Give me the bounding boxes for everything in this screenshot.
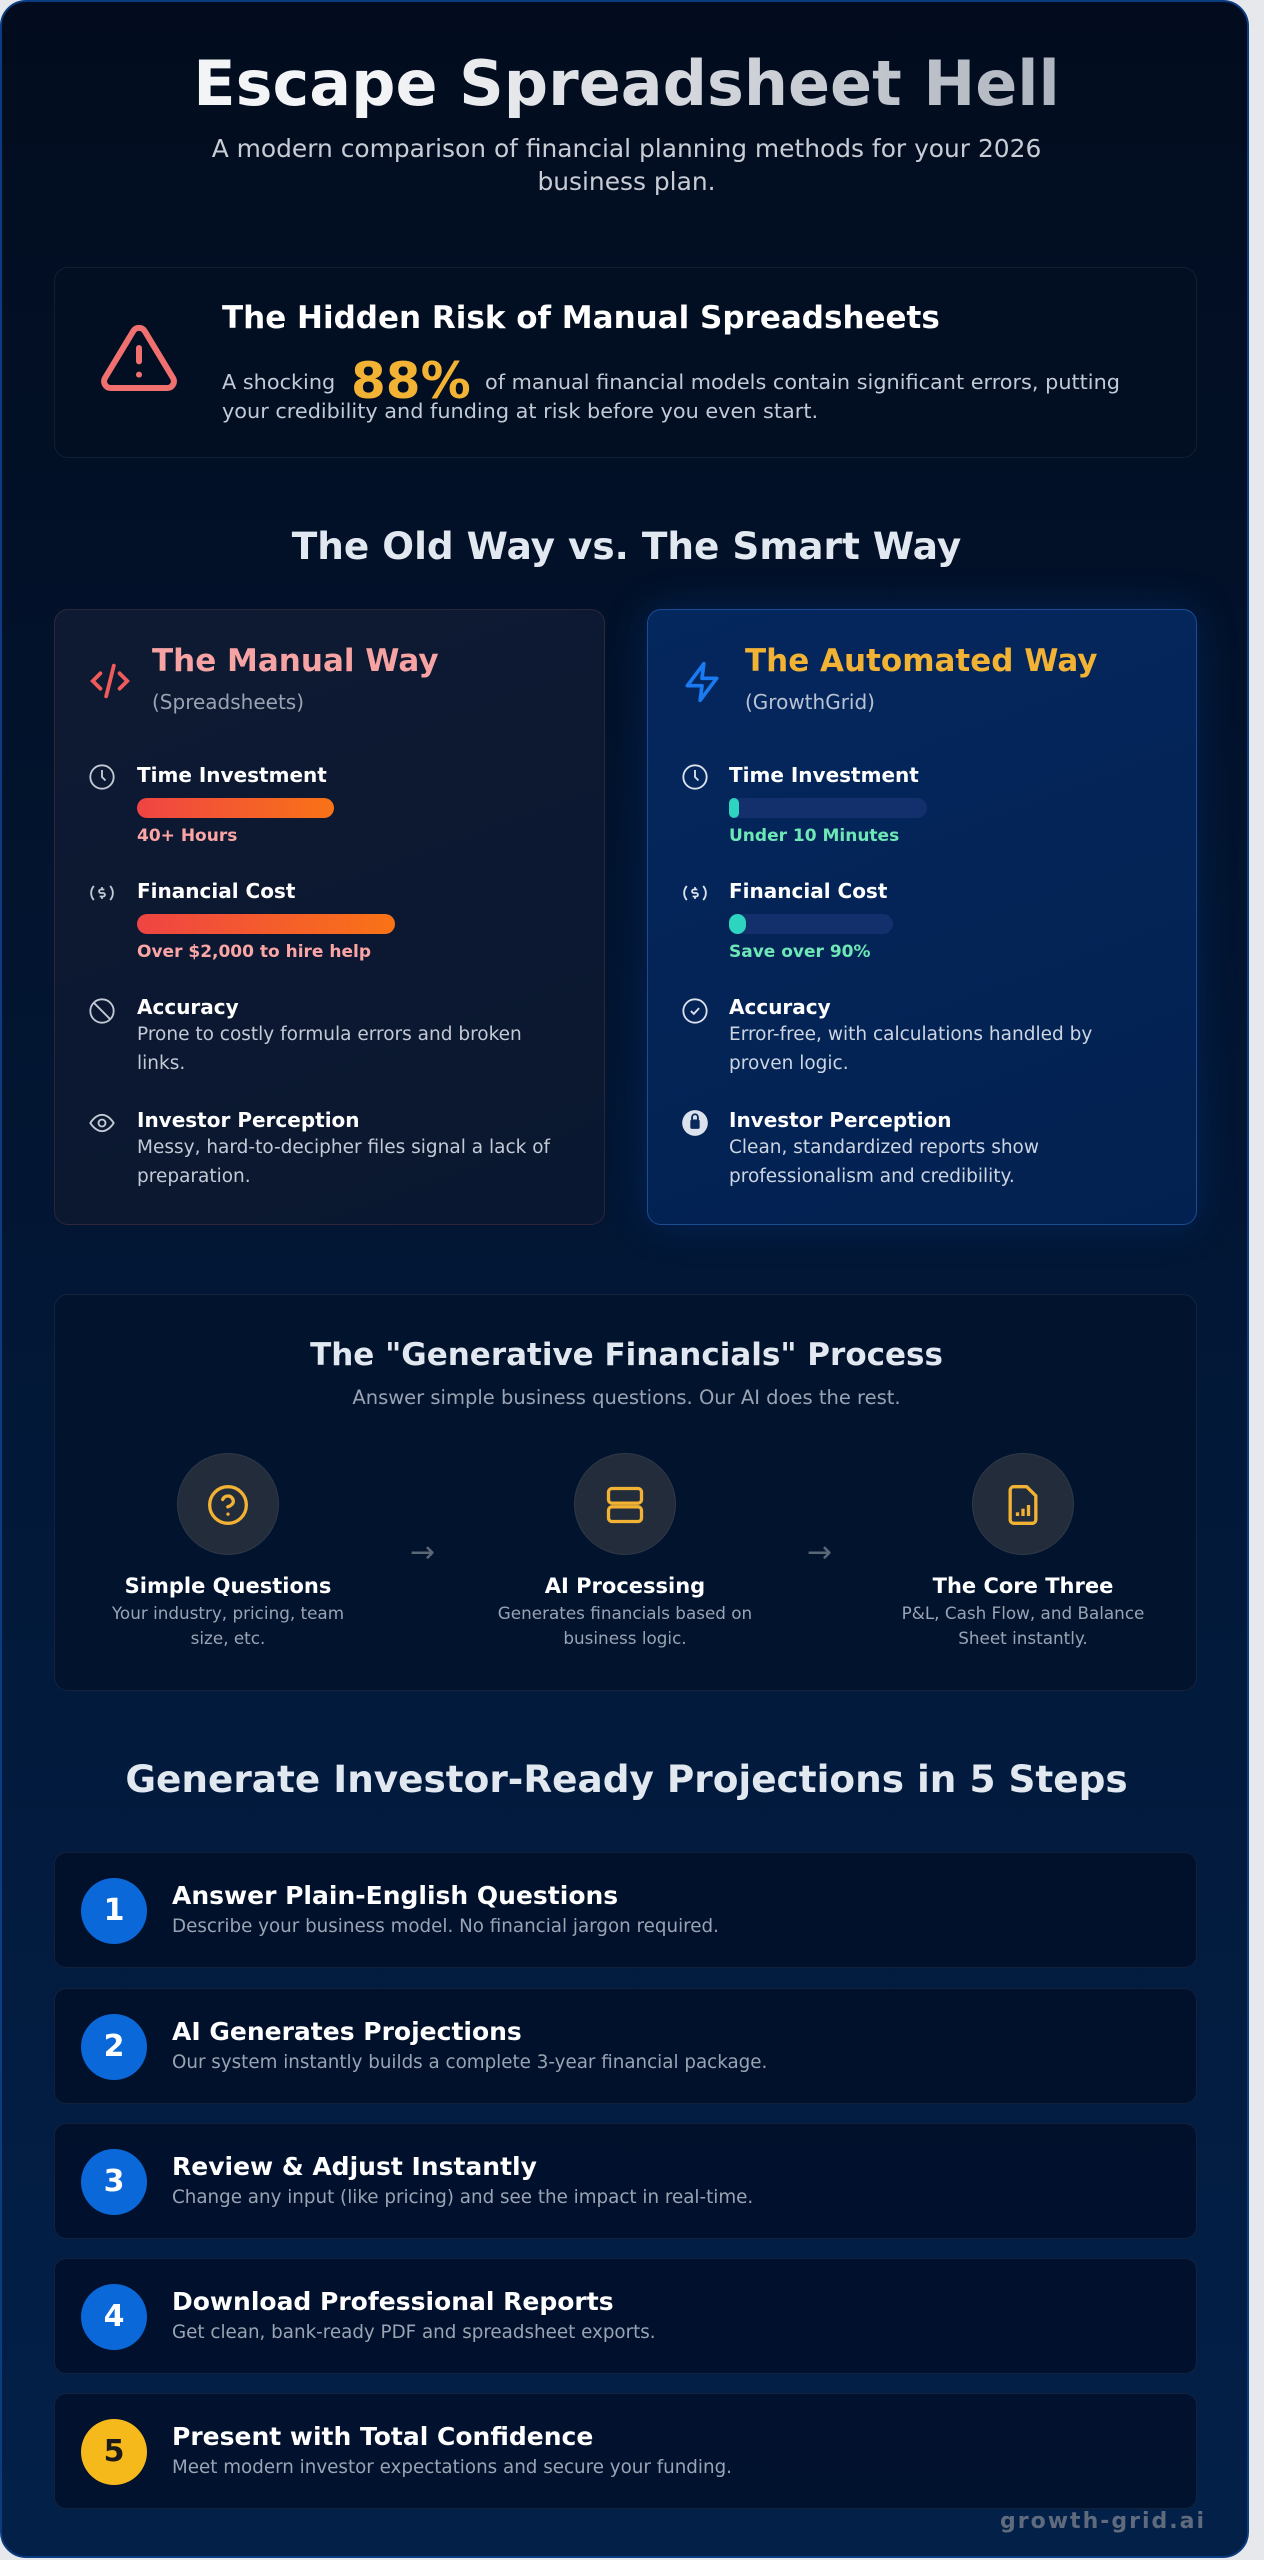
title: Escape Spreadsheet Hell: [193, 47, 1060, 120]
step 5: [54, 2393, 1197, 2509]
icon: file chart: [972, 1453, 1074, 1555]
stat text: your credibility and funding at risk before you even start.: [222, 399, 818, 423]
step 4: 4: [104, 2299, 124, 2334]
step: AI processing: Generates financials based on business logic.: [498, 1603, 752, 1648]
step: simple questions: Your industry, pricing, team size, etc.: [112, 1603, 344, 1648]
step 2: 2: [104, 2029, 124, 2064]
step 4: Download Professional Reports: [172, 2287, 614, 2316]
step 5: Present with Total Confidence: [172, 2422, 593, 2451]
stat: 88%: 88%: [351, 352, 471, 410]
icon: bolt: [685, 662, 719, 702]
step: simple questions: [112, 1453, 344, 1648]
footer brand: growth-grid.ai: [1000, 2509, 1206, 2534]
arrow: →: [807, 1535, 832, 1570]
step 5: 5: [104, 2434, 124, 2469]
item: accuracy: Accuracy: [729, 995, 831, 1019]
subtitle: A modern comparison of financial planning methods for your 2026: [212, 134, 1041, 163]
card title: The Manual Way: [152, 643, 439, 679]
item: perception: Investor Perception: [729, 1108, 952, 1132]
stat text: A shocking: [222, 370, 335, 394]
item: perception: [682, 1108, 1039, 1187]
item: time: [682, 763, 927, 846]
step 3: 3: [104, 2164, 124, 2199]
step 5: Meet modern investor expectations and secure your funding.: [172, 2457, 732, 2478]
subtitle: business plan.: [537, 167, 716, 196]
item: accuracy: Accuracy: [137, 995, 239, 1019]
item: cost: Financial Cost: [729, 879, 887, 903]
subtitle: [212, 134, 1041, 196]
item: cost: Over $2,000 to hire help: [137, 942, 371, 962]
step 1: [54, 1852, 1197, 1968]
step 3: Review & Adjust Instantly: [172, 2152, 537, 2181]
step 4: Get clean, bank-ready PDF and spreadsheet exports.: [172, 2322, 656, 2343]
step: core three: The Core Three: [933, 1574, 1113, 1598]
item: accuracy: [682, 995, 1092, 1074]
icon: warning triangle: [101, 324, 177, 391]
stat text: [222, 352, 1120, 423]
item: time: Time Investment: [137, 763, 327, 787]
step 4: [54, 2258, 1197, 2374]
item: time: Time Investment: [729, 763, 919, 787]
item: perception: Investor Perception: [137, 1108, 360, 1132]
step 1: Describe your business model. No financial jargon required.: [172, 1916, 719, 1937]
step: core three: [902, 1453, 1144, 1648]
step: core three: P&L, Cash Flow, and Balance Sheet instantly.: [902, 1603, 1144, 1648]
icon: code: [90, 664, 130, 698]
item: perception: Clean, standardized reports show professionalism and credibility.: [729, 1137, 1039, 1187]
icon: question: [177, 1453, 279, 1555]
card title: The Automated Way: [745, 643, 1098, 679]
process subtitle: Answer simple business questions. Our AI does the rest.: [352, 1386, 901, 1409]
panel: manual way: [54, 609, 605, 1225]
item: accuracy: Prone to costly formula errors and broken links.: [137, 1024, 522, 1074]
item: accuracy: [89, 995, 522, 1074]
item: time: [89, 763, 334, 846]
step 2: [54, 1988, 1197, 2104]
step 3: [54, 2123, 1197, 2239]
step 1: 1: [104, 1893, 124, 1928]
heading: The Hidden Risk of Manual Spreadsheets: [222, 300, 940, 336]
item: perception: [89, 1108, 550, 1187]
stat text: of manual financial models contain significant errors, putting: [485, 370, 1120, 394]
process heading: The "Generative Financials" Process: [310, 1337, 943, 1373]
item: cost: [90, 879, 395, 962]
icon: server: [574, 1453, 676, 1555]
step: AI processing: [498, 1453, 752, 1648]
step 2: Our system instantly builds a complete 3-year financial package.: [172, 2052, 767, 2073]
step 3: Change any input (like pricing) and see the impact in real-time.: [172, 2187, 753, 2208]
item: time: Under 10 Minutes: [729, 826, 899, 846]
panel: hidden risk: [54, 267, 1197, 458]
step 1: Answer Plain-English Questions: [172, 1881, 618, 1910]
title: [2, 44, 1251, 124]
panel: automated way: (GrowthGrid): [745, 690, 875, 714]
panel: automated way: [647, 609, 1197, 1225]
step: simple questions: Simple Questions: [125, 1574, 331, 1598]
panel: manual way: (Spreadsheets): [152, 690, 304, 714]
step: AI processing: AI Processing: [545, 1574, 705, 1598]
item: cost: Financial Cost: [137, 879, 295, 903]
item: perception: Messy, hard-to-decipher files signal a lack of preparation.: [137, 1137, 550, 1187]
arrow: →: [410, 1535, 435, 1570]
item: accuracy: Error-free, with calculations handled by proven logic.: [729, 1024, 1092, 1074]
item: cost: Save over 90%: [729, 942, 871, 962]
step 2: AI Generates Projections: [172, 2017, 522, 2046]
panel: generative process: [54, 1294, 1197, 1691]
heading: old vs smart: The Old Way vs. The Smart Way: [292, 524, 961, 568]
item: cost: [683, 879, 893, 962]
item: time: 40+ Hours: [137, 826, 237, 846]
heading: 5 steps: Generate Investor-Ready Projections in 5 Steps: [125, 1757, 1128, 1801]
